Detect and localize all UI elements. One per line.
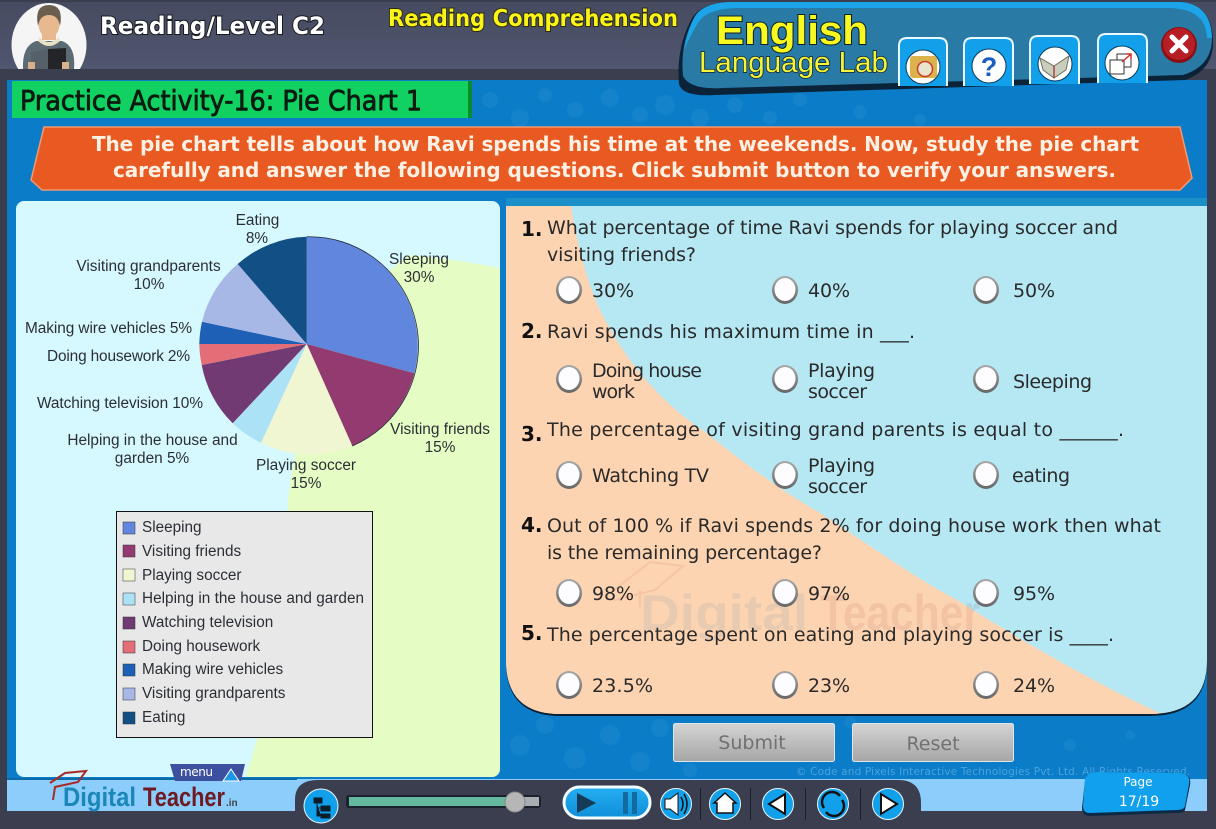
question 5: 24% <box>1013 675 1055 697</box>
pie data labels: 15% <box>291 475 322 492</box>
question 5 <box>521 621 1114 699</box>
question 2: Ravi spends his maximum time in ___. <box>547 321 915 343</box>
Language Lab heading: Language Lab <box>699 47 888 79</box>
icon: replay <box>818 788 848 820</box>
legend <box>116 512 372 738</box>
question 2: Playing <box>808 360 875 382</box>
reset button: Reset <box>906 733 960 755</box>
pie data labels <box>25 212 490 492</box>
pie chart <box>199 237 418 454</box>
slice: making wire vehicles 5% <box>199 322 307 344</box>
question 5: 23.5% <box>592 675 653 697</box>
question 1 <box>521 217 1118 304</box>
header topic text: Reading Comprehension <box>388 6 678 32</box>
question 3: Playing <box>808 455 875 477</box>
instruction banner: carefully and answer the following questions. Click submit button to verify your answers. <box>113 158 1116 182</box>
pie data labels: Eating <box>236 212 279 229</box>
question 1: 40% <box>808 280 850 302</box>
pie data labels: Helping in the house and <box>67 432 238 449</box>
question 2: Doing house <box>592 360 702 382</box>
menu tab <box>170 764 245 781</box>
submit button <box>674 724 834 762</box>
question 3: The percentage of visiting grand parents is equal to ______. <box>546 419 1124 441</box>
page indicator: 17/19 <box>1119 794 1159 810</box>
question 4: 97% <box>808 583 850 605</box>
pie data labels: Sleeping <box>389 251 449 268</box>
slice: helping in the house and garden 5% <box>233 344 307 443</box>
question 2: soccer <box>808 381 867 403</box>
question 2 <box>521 319 1092 403</box>
Digital Teacher logo <box>50 771 238 812</box>
icon: help tab <box>964 38 1013 86</box>
legend: Visiting friends <box>142 543 242 560</box>
question 4: is the remaining percentage? <box>547 542 822 564</box>
footer bar <box>0 778 1216 829</box>
legend: Playing soccer <box>142 567 241 584</box>
question 5: 23% <box>808 675 850 697</box>
icon: open book tab <box>1030 36 1079 84</box>
pie data labels: garden 5% <box>115 450 190 467</box>
question 4: 98% <box>592 583 634 605</box>
question 1: What percentage of time Ravi spends for playing soccer and <box>547 217 1118 239</box>
question 2: Sleeping <box>1013 371 1092 393</box>
question 2: 2. <box>521 319 543 343</box>
reset button <box>852 724 1014 762</box>
pie data labels: Visiting friends <box>390 421 490 438</box>
Digital Teacher logo: Digital <box>63 782 136 812</box>
pie data labels: Making wire vehicles 5% <box>25 320 192 337</box>
pie data labels: 30% <box>404 269 435 286</box>
instruction banner <box>31 127 1192 190</box>
slice: playing soccer 15% <box>261 344 352 454</box>
question 3: eating <box>1012 465 1070 487</box>
pie data labels: Visiting grandparents <box>76 258 221 275</box>
title bar: practice activity: Practice Activity-16: Pie Chart 1 <box>20 84 422 117</box>
icon: close button <box>1161 27 1197 63</box>
watermark logo: Digital <box>640 585 808 641</box>
watermark logo: Teacher <box>820 585 980 641</box>
instruction banner: The pie chart tells about how Ravi spends his time at the weekends. Now, study the pie chart <box>92 132 1139 156</box>
Digital Teacher logo: Teacher <box>143 782 225 812</box>
question 5: The percentage spent on eating and playing soccer is ____. <box>546 624 1114 646</box>
slice: doing housework 2% <box>199 344 307 365</box>
question 4 <box>521 513 1161 607</box>
slice: visiting grandparents 10% <box>202 264 307 344</box>
panel: questions <box>506 198 1207 720</box>
legend: Visiting grandparents <box>142 685 286 702</box>
pie data labels: Watching television 10% <box>37 395 203 412</box>
Digital Teacher logo: .in <box>226 798 238 809</box>
icon: tree menu button <box>304 789 338 823</box>
question 1: 50% <box>1013 280 1055 302</box>
slice: sleeping 30% <box>307 237 418 373</box>
legend: Helping in the house and garden <box>142 590 364 607</box>
copyright text: © Code and Pixels Interactive Technologies Pvt. Ltd. All Rights Reserved. <box>796 766 1190 778</box>
pie outline <box>307 237 418 446</box>
legend: Sleeping <box>142 519 202 536</box>
question 4: 4. <box>521 513 543 537</box>
question 3: soccer <box>808 476 867 498</box>
pie data labels: 10% <box>134 276 165 293</box>
submit button: Submit <box>718 732 786 754</box>
pie data labels: Doing housework 2% <box>47 348 190 365</box>
English heading: English <box>716 9 868 53</box>
slice: visiting friends 15% <box>307 344 414 446</box>
question 2: work <box>592 381 635 403</box>
legend: Doing housework <box>142 638 261 655</box>
legend: Watching television <box>142 614 273 631</box>
legend: Eating <box>142 709 185 726</box>
slice: eating 8% <box>238 237 307 344</box>
avatar: reader with book <box>12 3 86 69</box>
pie data labels: 15% <box>425 439 456 456</box>
header bar <box>0 2 1216 69</box>
question 3: 3. <box>521 422 543 446</box>
question 1: visiting friends? <box>547 244 696 266</box>
page indicator <box>1082 772 1190 816</box>
progress slider <box>346 792 541 812</box>
watermark logo <box>614 562 980 641</box>
panel: pie chart <box>16 201 500 778</box>
play and pause control <box>564 787 650 818</box>
question 4: 95% <box>1013 583 1055 605</box>
slice: watching television 10% <box>202 344 307 423</box>
header level text: Reading/Level C2 <box>100 12 325 40</box>
question 1: 1. <box>521 217 543 241</box>
question 1: 30% <box>592 280 634 302</box>
question 4: Out of 100 % if Ravi spends 2% for doing house work then what <box>547 515 1161 537</box>
question 3 <box>521 419 1124 498</box>
icon: home <box>710 788 740 820</box>
pie data labels: 8% <box>246 230 268 247</box>
icon: volume <box>660 788 692 820</box>
menu tab: menu <box>180 765 213 779</box>
legend: Making wire vehicles <box>142 661 283 678</box>
question 3: Watching TV <box>592 465 709 487</box>
icon: windows tab <box>1098 34 1147 83</box>
English Language Lab panel <box>678 2 1213 95</box>
page indicator: Page <box>1123 775 1153 789</box>
pie data labels: Playing soccer <box>256 457 356 474</box>
icon: help tab: ? <box>981 52 997 82</box>
icon: next <box>872 788 904 820</box>
question 5: 5. <box>521 621 543 645</box>
icon: previous <box>762 788 794 820</box>
icon: goals folder tab <box>899 38 947 86</box>
